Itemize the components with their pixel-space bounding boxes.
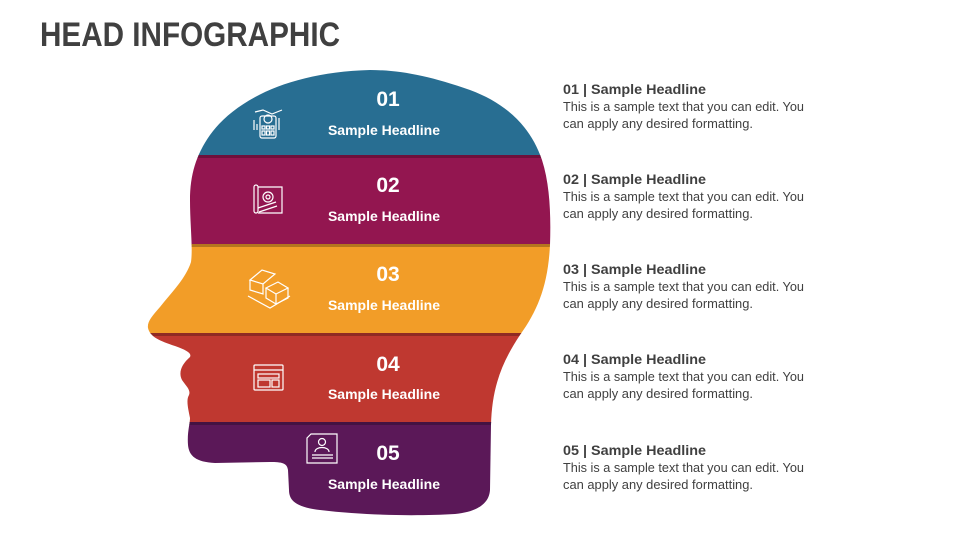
- icon: boxes: [248, 270, 290, 308]
- item 03 text: 03 | Sample Headline: [563, 261, 706, 277]
- band labels: Sample Headline: [328, 386, 440, 402]
- band labels: 04: [376, 353, 400, 376]
- band labels: Sample Headline: [328, 297, 440, 313]
- band 05: [188, 422, 492, 516]
- item 03 text: [563, 261, 804, 311]
- item 01 text: [563, 81, 804, 131]
- item 02 text: This is a sample text that you can edit. You: [563, 190, 804, 204]
- item 02 text: can apply any desired formatting.: [563, 207, 753, 221]
- item 05 text: can apply any desired formatting.: [563, 478, 753, 492]
- band labels: [328, 88, 440, 492]
- descriptions: [563, 81, 804, 492]
- band 03: [148, 244, 550, 334]
- item 04 text: can apply any desired formatting.: [563, 387, 753, 401]
- item 04 text: This is a sample text that you can edit. You: [563, 370, 804, 384]
- item 02 text: [563, 171, 804, 221]
- item 04 text: 04 | Sample Headline: [563, 351, 706, 367]
- icon: resume: [307, 434, 337, 463]
- item 03 text: can apply any desired formatting.: [563, 297, 753, 311]
- item 01 text: 01 | Sample Headline: [563, 81, 706, 97]
- band 02: [190, 155, 550, 245]
- band labels: 05: [376, 442, 400, 465]
- title: HEAD INFOGRAPHIC: [40, 16, 340, 54]
- item 01 text: This is a sample text that you can edit. You: [563, 100, 804, 114]
- band labels: 01: [376, 88, 400, 111]
- item 05 text: [563, 442, 804, 492]
- item 05 text: This is a sample text that you can edit. You: [563, 461, 804, 475]
- band labels: Sample Headline: [328, 476, 440, 492]
- band 01: [198, 70, 540, 156]
- band labels: 02: [376, 174, 400, 197]
- band labels: 03: [376, 263, 400, 286]
- item 05 text: 05 | Sample Headline: [563, 442, 706, 458]
- icon: blueprint gear: [254, 185, 282, 213]
- icon: browser window: [254, 365, 283, 390]
- item 04 text: [563, 351, 804, 401]
- item 03 text: This is a sample text that you can edit. You: [563, 280, 804, 294]
- band labels: Sample Headline: [328, 208, 440, 224]
- icon: calculator: [254, 110, 282, 138]
- head infographic: [148, 70, 550, 516]
- item 01 text: can apply any desired formatting.: [563, 117, 753, 131]
- band labels: Sample Headline: [328, 122, 440, 138]
- item 02 text: 02 | Sample Headline: [563, 171, 706, 187]
- band 04: [150, 333, 522, 423]
